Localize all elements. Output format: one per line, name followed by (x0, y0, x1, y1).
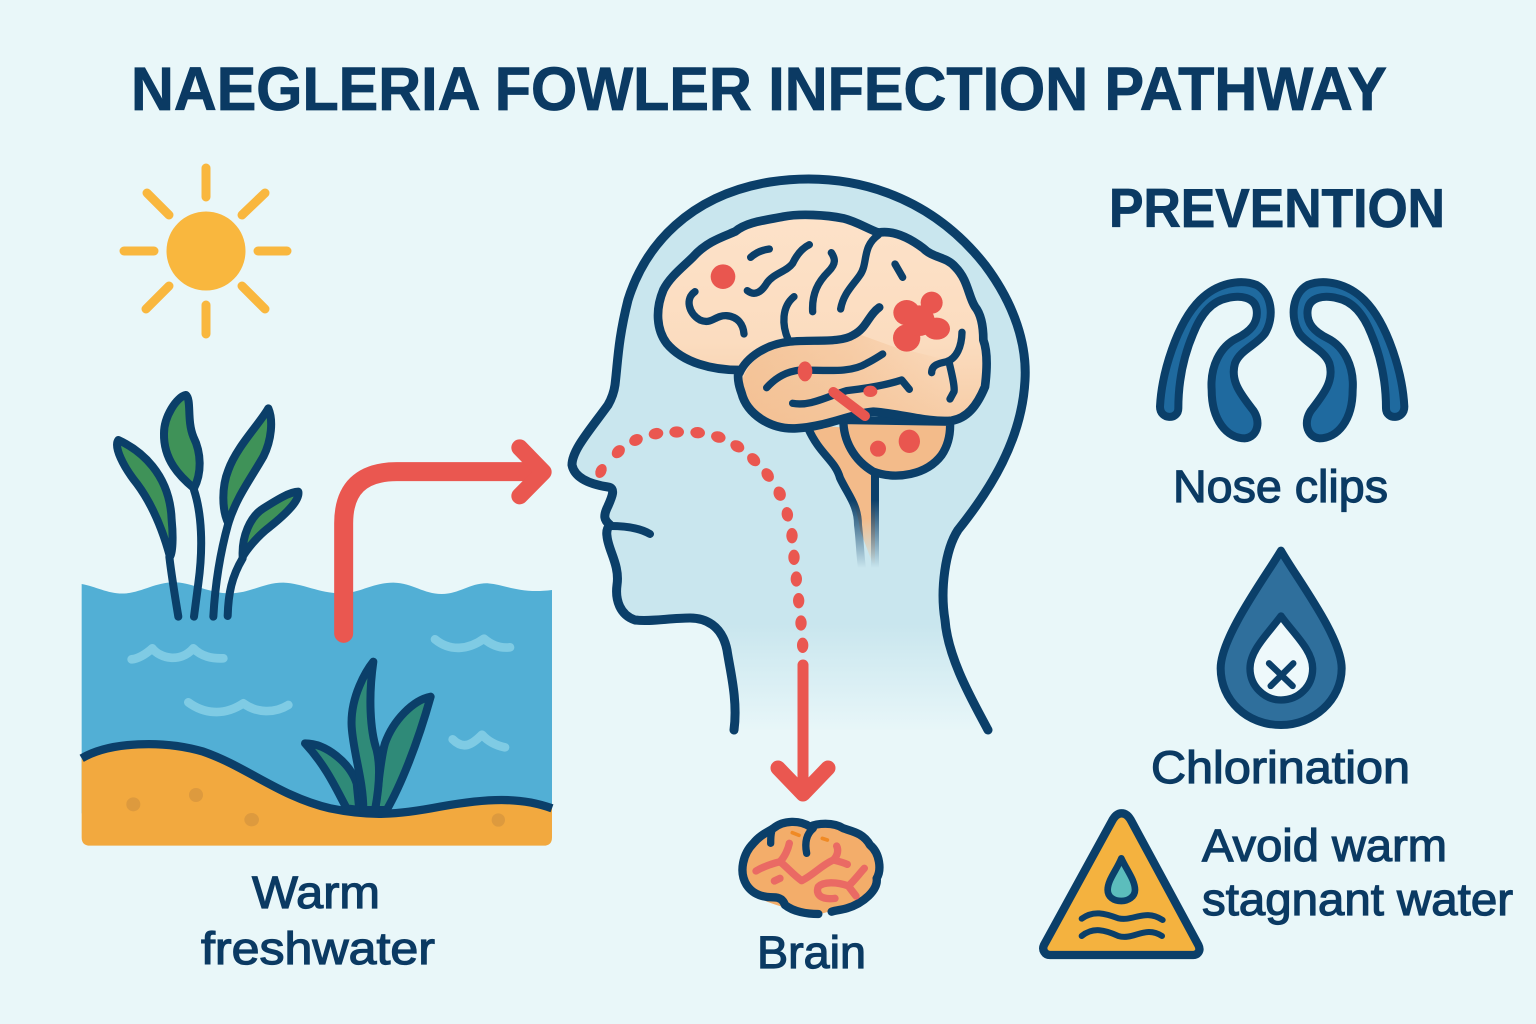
triangle body (1043, 813, 1199, 955)
water (82, 582, 552, 813)
title: NAEGLERIA FOWLER INFECTION PATHWAY (131, 55, 1387, 123)
head fill (572, 179, 1025, 730)
shoreline (82, 744, 552, 814)
brain (658, 215, 987, 570)
small orange marks (792, 833, 827, 840)
water ripples (132, 639, 510, 747)
outer drop (1221, 551, 1342, 725)
upper plant (117, 395, 298, 617)
arrow: water to nose (344, 448, 543, 633)
cross mark (1269, 663, 1293, 686)
label: avoid warm stagnant water (1202, 820, 1513, 925)
brain stem (808, 425, 880, 570)
label: nose clips: Nose clips (1173, 461, 1388, 512)
label: avoid warm stagnant water: Avoid warm (1202, 820, 1447, 871)
brain folds (689, 235, 962, 404)
icon: sun (124, 168, 287, 334)
water waves (1082, 913, 1163, 937)
small brain inner folds (771, 828, 813, 853)
infection spots (711, 264, 950, 457)
cerebrum (658, 215, 987, 428)
label: avoid warm stagnant water: stagnant water (1202, 874, 1513, 925)
icon: chlorination drop (1221, 551, 1342, 725)
sand (82, 744, 552, 846)
icon: infected brain (742, 822, 879, 914)
label: chlorination: Chlorination (1151, 742, 1410, 793)
head outline (572, 179, 1025, 730)
icon: warning triangle (1043, 813, 1199, 955)
arrow: down to brain (778, 665, 828, 794)
pond scene (82, 395, 552, 846)
red vessels (756, 843, 864, 899)
brain outline (658, 215, 987, 428)
small drop (1108, 858, 1135, 901)
small brain outline (742, 822, 879, 914)
small brain body (742, 822, 879, 914)
label: brain: Brain (757, 927, 866, 978)
label: warm freshwater (201, 867, 435, 974)
cerebellum (843, 420, 950, 476)
label: warm freshwater: Warm (252, 867, 380, 918)
icon: nose clips (1160, 282, 1404, 438)
mouth (610, 526, 650, 534)
label: warm freshwater: freshwater (201, 923, 435, 974)
sand pebbles (126, 788, 505, 827)
inner drop (1250, 616, 1313, 700)
head profile (572, 179, 1025, 730)
heading: prevention: PREVENTION (1109, 177, 1445, 239)
temporal lobe (742, 333, 973, 428)
dotted pathway: nose to brain (593, 426, 808, 653)
underwater plant (305, 662, 431, 810)
